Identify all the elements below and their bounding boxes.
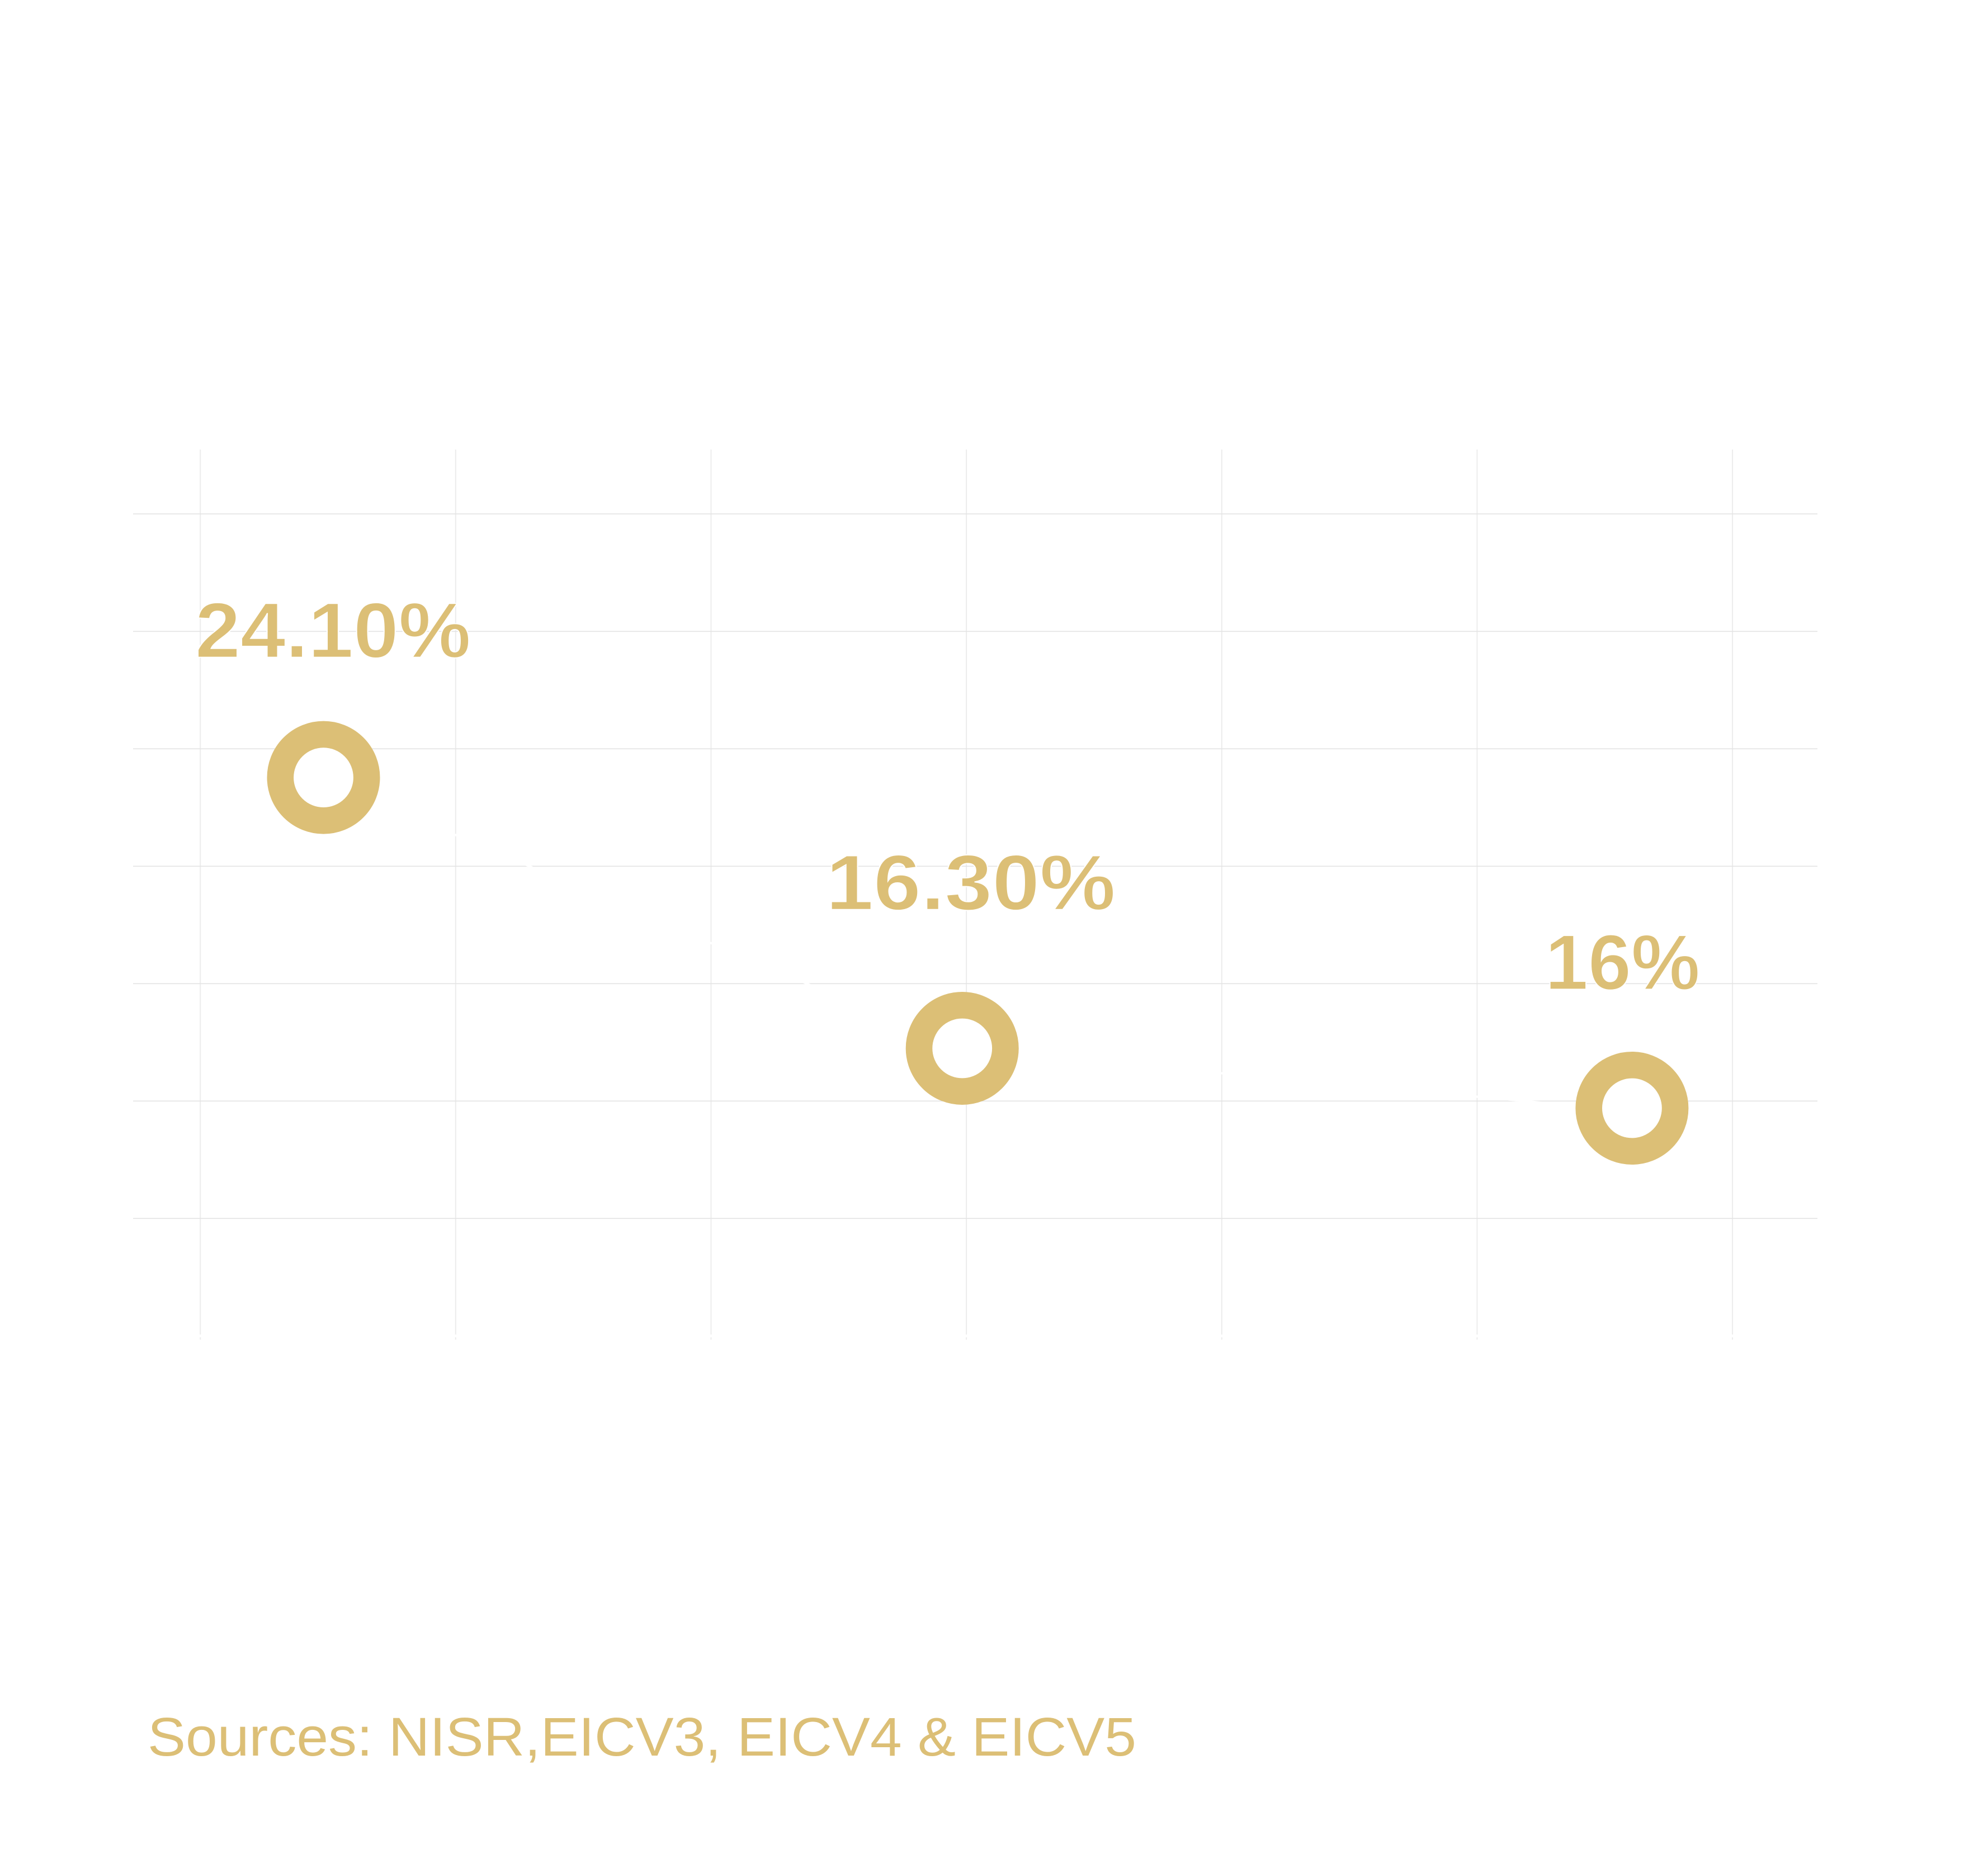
data point: 24.10% xyxy=(195,587,471,821)
data point: 16%: 16% xyxy=(1545,918,1700,1006)
chart grid xyxy=(133,450,1817,1340)
data point: 24.10%: 24.10% xyxy=(195,587,471,674)
data point: 16.30%: 16.30% xyxy=(826,839,1116,926)
data point: 16.30% xyxy=(826,839,1116,1091)
line chart xyxy=(133,450,1817,1340)
white x axis xyxy=(133,1335,1817,1337)
sources note: Sources: NISR,EICV3, EICV4 & EICV5 xyxy=(148,1706,1136,1767)
data point: 16% xyxy=(1545,918,1700,1151)
white connecting trend line xyxy=(323,779,1632,1111)
